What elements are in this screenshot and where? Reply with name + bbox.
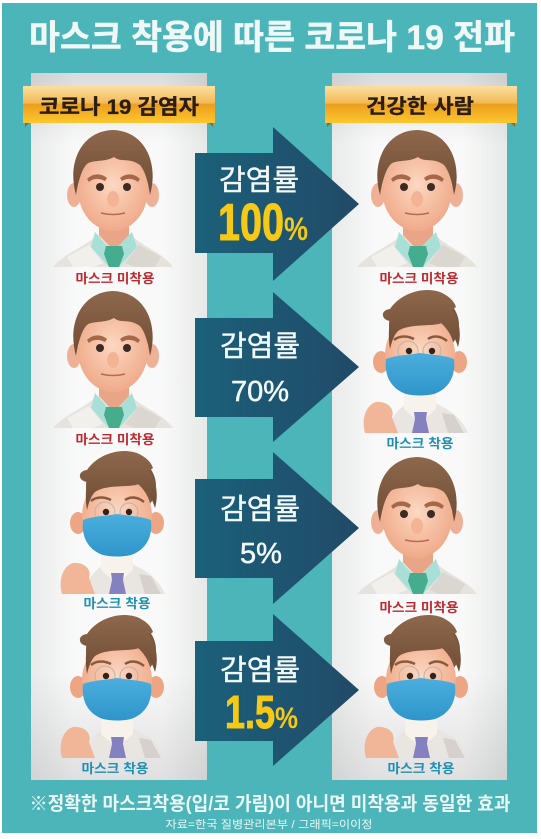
panel: infected people (23, 73, 215, 780)
header ribbon: infected (23, 86, 215, 127)
doctor with mask, row 4 right (365, 615, 469, 776)
doctor with mask, row 2 right: 마스크 착용 (386, 436, 454, 451)
arrow: infection rate 100%: 100 (218, 194, 284, 252)
doctor without mask, row 2 (53, 291, 173, 447)
arrow: infection rate 5% (195, 452, 359, 604)
doctor with mask, row 4: 마스크 착용 (82, 761, 149, 776)
header ribbon: infected: 코로나 19 감염자 (39, 96, 199, 119)
arrow: infection rate 1.5%: 감염률 (220, 655, 300, 687)
arrow: infection rate 70% (195, 292, 359, 442)
arrow: infection rate 70%: 70% (231, 376, 289, 408)
header ribbon: healthy: 건강한 사람 (366, 95, 474, 118)
doctor without mask, row 2: 마스크 미착용 (76, 432, 155, 447)
arrow: infection rate 5%: 5% (240, 538, 282, 570)
doctor with mask, row 2 right (364, 290, 468, 451)
arrow: infection rate 100%: 감염률 (219, 165, 299, 197)
header ribbon: healthy (325, 86, 517, 127)
arrow: infection rate 100%: % (284, 211, 308, 247)
arrow: infection rate 1.5%: 1.5 (225, 686, 275, 738)
doctor without mask, row 3 right (357, 457, 477, 615)
doctor without mask, row 1 right: 마스크 미착용 (380, 271, 459, 286)
doctor without mask, row 1: 마스크 미착용 (76, 271, 155, 286)
arrow: infection rate 1.5% (195, 614, 359, 766)
doctor with mask, row 3 (61, 451, 165, 611)
doctor without mask, row 1 right (357, 130, 477, 286)
doctor without mask, row 1 (53, 130, 173, 286)
doctor with mask, row 4 (61, 615, 165, 776)
doctor with mask, row 3: 마스크 착용 (84, 596, 151, 611)
arrow: infection rate 1.5%: % (275, 702, 298, 735)
arrow: infection rate 70%: 감염률 (220, 331, 300, 363)
footnote: ※정확한 마스크착용(입/코 가림)이 아니면 미착용과 동일한 효과 (30, 793, 510, 815)
arrow: infection rate 5%: 감염률 (220, 494, 300, 526)
doctor without mask, row 3 right: 마스크 미착용 (380, 600, 459, 615)
title: 마스크 착용에 따른 코로나 19 전파 (29, 19, 515, 57)
source credit: 자료=한국 질병관리본부 / 그래픽=이이정 (166, 818, 372, 831)
doctor with mask, row 4 right: 마스크 착용 (388, 761, 455, 776)
panel: healthy people (325, 73, 517, 780)
arrow: infection rate 100% (195, 127, 359, 281)
